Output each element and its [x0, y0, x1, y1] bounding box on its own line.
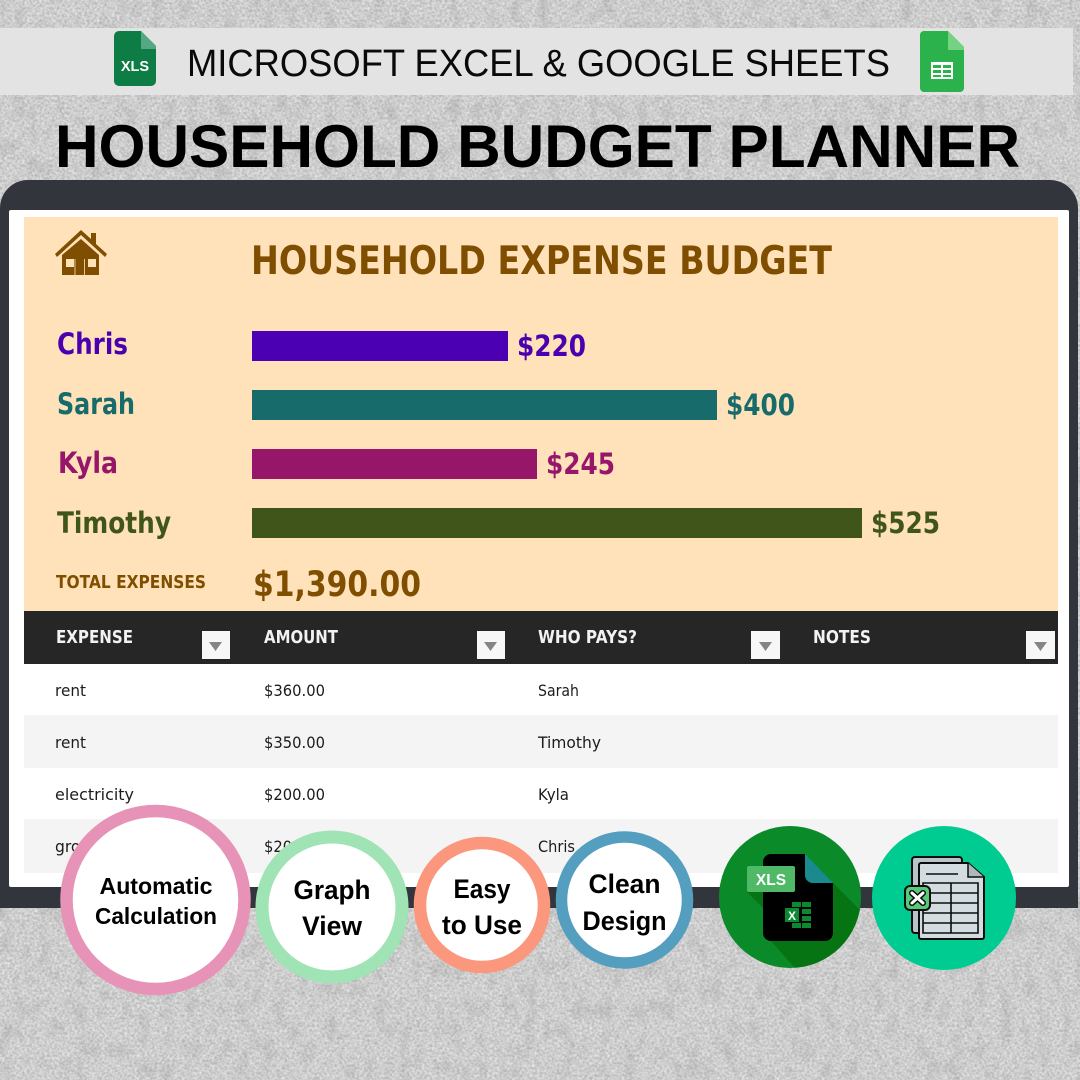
- badge: Easy to Use: [420, 843, 544, 967]
- total expenses label: TOTAL EXPENSES: [56, 572, 206, 593]
- bar: Timothy: [57, 506, 940, 540]
- table header row: EXPENSE: [56, 627, 133, 648]
- table header row: NOTES: [813, 627, 871, 648]
- table row: electricity Kyla: electricity: [55, 785, 134, 804]
- table row: groceries Chris: groceries: [55, 837, 127, 856]
- table row: rent Sarah: Sarah: [538, 681, 579, 700]
- icon: Excel document in green circle: [719, 826, 861, 968]
- badge: Graph View: [262, 837, 402, 977]
- icon: house: [55, 230, 107, 275]
- header strip: platforms: [0, 28, 1073, 95]
- icon: Excel document in green circle: X: [788, 909, 796, 923]
- icon: spreadsheet pages in teal circle: [872, 826, 1016, 970]
- badge: Automatic Calculation: Calculation: [95, 903, 217, 929]
- bar: Chris: [57, 327, 586, 363]
- bar: Kyla: [58, 446, 615, 481]
- table row: groceries Chris: [55, 837, 575, 856]
- panel: budget summary: [24, 217, 1058, 611]
- screen white area: [9, 210, 1069, 887]
- total expenses value: $1,390.00: [253, 565, 421, 605]
- laptop screen mockup: [0, 180, 1078, 908]
- icon: Excel XLS file: XLS: [121, 59, 149, 75]
- dropdown buttons: [202, 631, 1055, 659]
- table header row: WHO PAYS?: [538, 627, 637, 648]
- table row: electricity Kyla: [55, 785, 569, 804]
- bar: Timothy: $525: [871, 506, 940, 540]
- table row stripe: [24, 715, 1058, 768]
- header text: MICROSOFT EXCEL & GOOGLE SHEETS: [187, 43, 890, 85]
- badge: Clean Design: Clean: [588, 869, 660, 899]
- icon: Excel document in green circle: XLS: [756, 872, 786, 889]
- table header row: [24, 611, 1058, 664]
- table row: rent Sarah: [55, 681, 579, 700]
- table row: electricity Kyla: $200.00: [264, 785, 325, 804]
- icon: Google Sheets file: [920, 31, 964, 92]
- table row: electricity Kyla: Kyla: [538, 785, 569, 804]
- table row: rent Sarah: rent: [55, 681, 86, 700]
- badge: Automatic Calculation: Automatic: [100, 873, 213, 899]
- badge: Automatic Calculation: [66, 811, 244, 989]
- table row: rent Sarah: $360.00: [264, 681, 325, 700]
- badge: Graph View: View: [302, 911, 363, 941]
- bar: Sarah: Sarah: [57, 387, 135, 421]
- badge: Easy to Use: to Use: [442, 910, 522, 940]
- bar: Timothy: Timothy: [57, 506, 171, 540]
- table row: rent Timothy: $350.00: [264, 733, 325, 752]
- panel heading: HOUSEHOLD EXPENSE BUDGET: [251, 239, 832, 284]
- table row: groceries Chris: $200.00: [264, 837, 325, 856]
- table header row: AMOUNT: [264, 627, 339, 648]
- bar: Chris: $220: [517, 329, 586, 363]
- table row: groceries Chris: Chris: [538, 837, 575, 856]
- bar: Kyla: Kyla: [58, 446, 118, 480]
- badge: Graph View: Graph: [294, 875, 370, 905]
- bar: Sarah: [57, 387, 795, 422]
- second row stripe: [24, 819, 1058, 873]
- bar chart: expenses per person: [57, 327, 940, 540]
- badge: Clean Design: Design: [582, 906, 666, 936]
- badge: Easy to Use: Easy: [454, 874, 510, 904]
- bar: Kyla: $245: [546, 447, 615, 481]
- icon: Excel XLS file: [114, 31, 156, 86]
- table row: rent Timothy: rent: [55, 733, 86, 752]
- table: expenses: [24, 611, 1058, 873]
- bar: Sarah: $400: [726, 388, 795, 422]
- screen bezel: [0, 180, 1078, 908]
- main title: HOUSEHOLD BUDGET PLANNER: [55, 113, 1020, 180]
- table row: rent Timothy: Timothy: [537, 733, 601, 752]
- bar: Chris: Chris: [57, 327, 128, 361]
- badge: Clean Design: [562, 837, 688, 963]
- table row: rent Timothy: [55, 733, 601, 752]
